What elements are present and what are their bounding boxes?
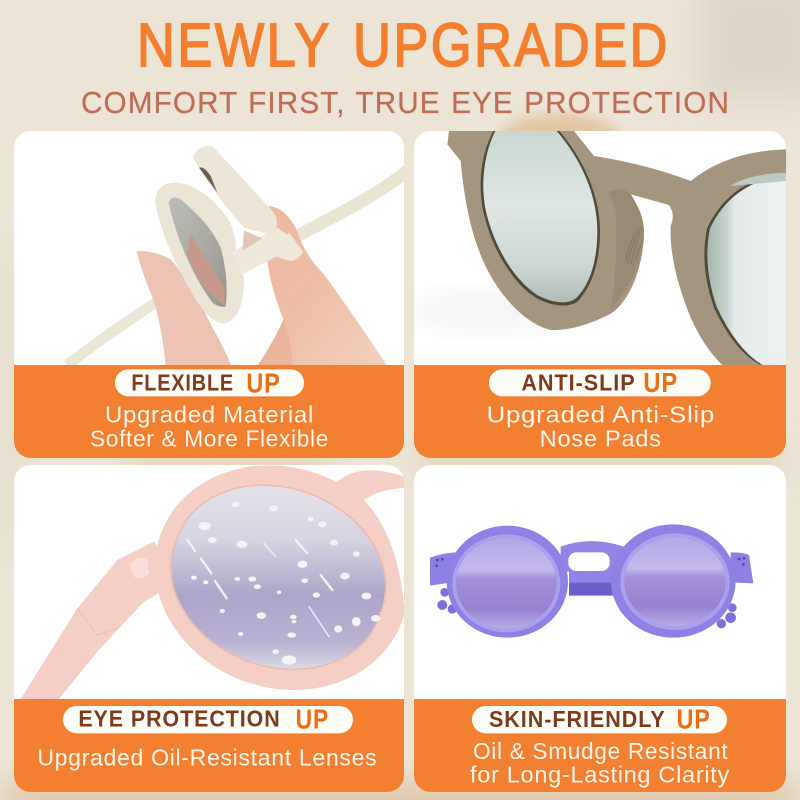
label: skin-friendly up: SKIN-FRIENDLY — [489, 706, 666, 732]
panel: flexible — [14, 131, 407, 458]
description: Nose Pads — [540, 426, 662, 452]
description: Oil & Smudge Resistant — [473, 738, 728, 764]
description: for Long-Lasting Clarity — [470, 762, 730, 788]
label: skin-friendly up: UP — [677, 703, 711, 734]
panel: skin-friendly — [414, 465, 786, 792]
description — [470, 738, 730, 788]
label: eye protection up — [63, 706, 353, 734]
description: Upgraded Anti-Slip — [487, 402, 715, 428]
description: Upgraded Oil-Resistant Lenses — [37, 745, 377, 771]
label: anti-slip up: ANTI-SLIP — [521, 370, 636, 396]
subtitle: COMFORT FIRST, TRUE EYE PROTECTION — [81, 85, 730, 120]
label: flexible up — [115, 369, 304, 396]
title: NEWLY UPGRADED — [137, 11, 670, 79]
description: Softer & More Flexible — [90, 426, 329, 452]
label: flexible up: FLEXIBLE — [131, 370, 234, 396]
description — [488, 406, 714, 446]
label: eye protection up: UP — [296, 703, 329, 734]
panel: eye protection — [14, 465, 404, 792]
panel: anti-slip — [407, 131, 786, 458]
photo: taupe sunglasses close-up — [407, 131, 786, 365]
label: anti-slip up — [489, 369, 711, 396]
photo: pink sunglasses with water drops — [20, 465, 404, 699]
photo: purple sunglasses — [430, 524, 753, 638]
label: eye protection up: EYE PROTECTION — [78, 706, 281, 732]
photo: flexible sunglasses bent by fingers — [67, 146, 407, 365]
label: flexible up: UP — [246, 368, 281, 399]
label: skin-friendly up — [472, 706, 727, 734]
description — [91, 406, 328, 446]
label: anti-slip up: UP — [643, 367, 678, 398]
description: Upgraded Material — [105, 402, 314, 428]
